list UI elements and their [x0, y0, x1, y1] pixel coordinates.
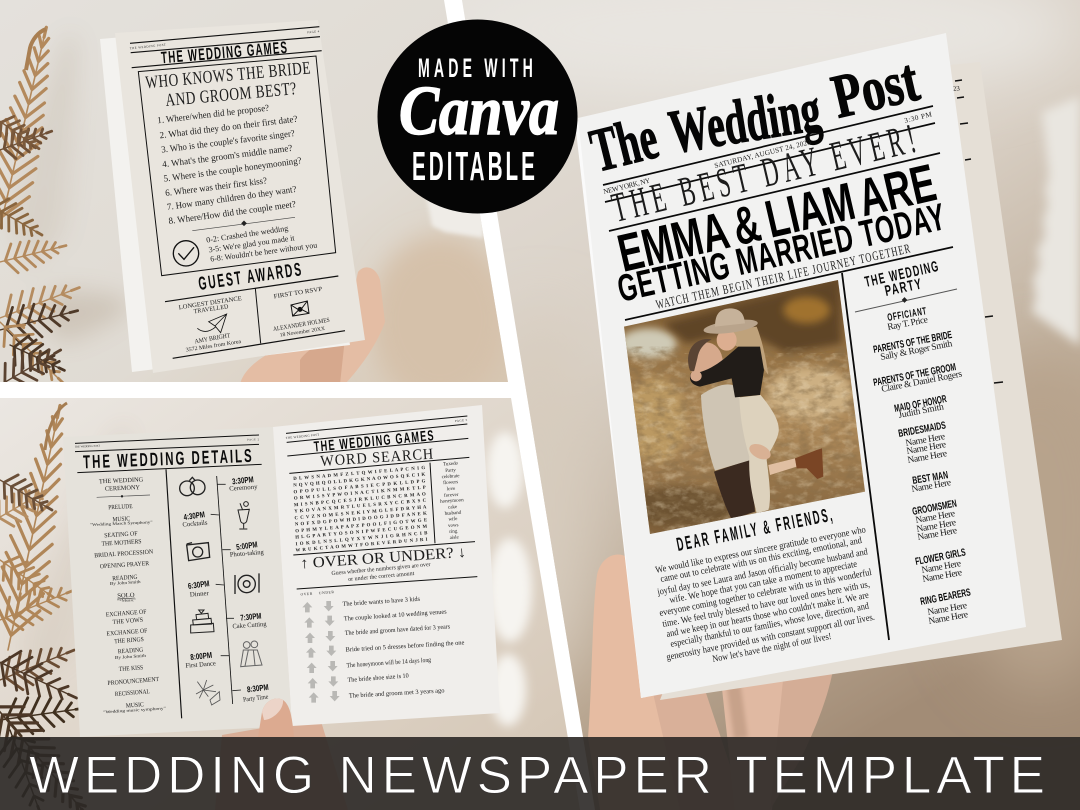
- letter body: generosity have provided us with constant support all our lives.: [665, 612, 876, 663]
- timeline times: 8:00PM: [190, 650, 212, 662]
- small labels: [130, 29, 320, 50]
- heading: who knows: AND GROOM BEST?: [165, 78, 297, 110]
- dateline: NEW YORK, NY: [603, 176, 652, 196]
- hand holding page: [240, 267, 385, 384]
- instructions: [331, 562, 431, 583]
- timeline captions: Cake Cutting: [232, 621, 267, 630]
- award: longest distance: [178, 295, 242, 354]
- heading: who knows: WHO KNOWS THE BRIDE: [145, 57, 312, 92]
- ceremony programme: SOLO: [117, 592, 135, 600]
- ceremony programme: THE WEDDING: [99, 476, 144, 485]
- title text: WEDDING NEWSPAPER TEMPLATE: [29, 746, 1045, 805]
- award: first to rsvp: FIRST TO RSVP: [273, 286, 323, 300]
- sidebar roles: [872, 305, 972, 608]
- timeline times: 8:30PM: [246, 682, 269, 694]
- sidebar names: Name Here: [905, 432, 946, 449]
- woman face: [716, 332, 736, 351]
- question list: 8. Where/How did the couple meet?: [168, 200, 297, 227]
- man head: [692, 342, 722, 372]
- word search grid: D L W S N A D M F Z L T Q W I F E L A P C N I G: [293, 466, 426, 482]
- icon: fireworks: [196, 680, 220, 705]
- small labels: PAGE 2: [247, 438, 260, 442]
- letter body: time. We feel truly blessed to have our loved ones here with us,: [661, 579, 871, 630]
- divider: [97, 495, 150, 497]
- photo grass texture: [620, 347, 873, 540]
- statements: The bride wants to have 3 kids: [342, 596, 421, 608]
- sidebar names: Name Here: [915, 509, 956, 526]
- heading: the wedding details: THE WEDDING DETAILS: [83, 445, 254, 472]
- timeline captions: Cocktails: [182, 519, 208, 529]
- sidebar names: Name Here: [916, 518, 957, 535]
- word list: cake: [448, 505, 458, 511]
- masthead: Post: [826, 46, 925, 132]
- background tan shade: [372, 229, 504, 382]
- heading: the wedding games: THE WEDDING GAMES: [160, 38, 289, 67]
- sidebar names: Name Here: [922, 568, 963, 585]
- timeline times: 5:00PM: [236, 539, 258, 552]
- timeline captions: First Dance: [185, 660, 216, 670]
- statements: [342, 596, 465, 700]
- headline: emma and liam: EMMA & LIAM ARE: [612, 153, 941, 284]
- page content: wedding details: [75, 435, 269, 718]
- back page sliver: [100, 22, 350, 372]
- ceremony programme: READING: [118, 647, 144, 655]
- woman trousers: [739, 395, 779, 513]
- icon: plate: [235, 573, 259, 594]
- fabric behind the booklet: [487, 432, 532, 726]
- timeline times: 6:30PM: [187, 578, 210, 591]
- page content: word search: [286, 416, 477, 703]
- heading: the wedding games: THE WEDDING GAMES: [313, 428, 435, 456]
- ceremony programme: By John Smith: [110, 579, 142, 586]
- timeline captions: Dinner: [190, 590, 210, 599]
- warm shade left: [518, 339, 599, 682]
- masthead: The: [584, 104, 664, 186]
- sidebar names: Name Here: [928, 610, 969, 627]
- back page: [660, 62, 1062, 700]
- sheet thickness: [575, 121, 646, 698]
- question list: 4. What's the groom's middle name?: [162, 144, 293, 170]
- ceremony programme: PRONOUNCEMENT: [107, 676, 159, 687]
- fern shadow: [14, 44, 126, 345]
- award: first to rsvp: ALEXANDER HOLMES: [273, 317, 331, 333]
- instructions: Guess whether the numbers given are over: [331, 562, 431, 577]
- ceremony programme: MUSIC: [112, 515, 130, 523]
- icon: paper plane: [197, 314, 227, 333]
- woman hat crown: [715, 308, 745, 327]
- sidebar roles: PARENTS OF THE GROOM: [872, 361, 957, 389]
- question list: 2. What did they do on their first date?: [159, 114, 298, 141]
- statements: Bride tried on 5 dresses before finding the one: [345, 639, 465, 654]
- badge: made with Canva editable: [378, 20, 578, 214]
- photo sky: [620, 328, 677, 358]
- letter body: especially thankful to our families, whose love, direction, and: [669, 601, 870, 650]
- divider: [192, 217, 295, 231]
- text: DEAR FAMILY & FRIENDS,: [675, 504, 836, 556]
- timeline times: [183, 474, 269, 694]
- score key: 3-5: We're glad you made it: [208, 233, 296, 254]
- sidebar names: Name Here: [917, 526, 958, 543]
- word list: forever: [444, 493, 459, 499]
- fern shadow: [30, 539, 74, 667]
- sidebar: the wedding party: [855, 258, 972, 627]
- question list: 5. Where is the couple honeymooning?: [163, 156, 302, 185]
- panel: main newspaper: [440, 0, 1080, 810]
- word list: Party: [445, 468, 457, 474]
- sidebar names: Name Here: [911, 478, 952, 495]
- ceremony programme: THE RINGS: [114, 636, 144, 645]
- back page date fragment: 23: [952, 84, 961, 93]
- statements: The couple looked at 10 wedding venues: [344, 608, 447, 623]
- letter body: and we keep in our hearts those who couldn't make it. We are: [665, 590, 870, 640]
- word list: flowers: [443, 480, 458, 486]
- up arrows: [302, 602, 319, 703]
- question list: [157, 104, 302, 227]
- woman top: [690, 347, 764, 397]
- award: longest distance: 3572 Miles from Korea: [185, 338, 242, 354]
- subhead: WATCH THEM BEGIN THEIR LIFE JOURNEY TOGETHER: [654, 240, 912, 312]
- ceremony programme: "Wedding music symphony": [103, 705, 166, 714]
- question list: 6. Where was their first kiss?: [165, 175, 268, 199]
- fern top-left: [0, 26, 81, 382]
- question list: 1. Where/when did he propose?: [157, 104, 270, 126]
- ceremony programme: PRELUDE: [108, 503, 133, 511]
- ceremony programme: "*Music": [117, 598, 137, 603]
- thumb over booklet: [258, 698, 294, 737]
- photo trees: [663, 280, 842, 353]
- front sheet: [578, 33, 1026, 698]
- panel: top-left games page: [0, 0, 520, 405]
- award: longest distance: LONGEST DISTANCE: [178, 295, 242, 311]
- timeline times: 3:30PM: [231, 474, 254, 486]
- timeline captions: Party Time: [243, 694, 269, 704]
- ceremony programme: MUSIC: [126, 701, 144, 710]
- icon: check circle: [173, 241, 199, 266]
- ceremony programme: SEATING OF: [104, 530, 138, 539]
- ceremony programme: EXCHANGE OF: [106, 608, 147, 619]
- column labels: OVER: [300, 592, 313, 597]
- column labels: [300, 590, 335, 597]
- timeline captions: Photo-taking: [230, 549, 265, 559]
- word search grid: N Q V Q H Q O L L D K G K N A O W O S Q E C I K: [293, 473, 426, 489]
- down arrows: [324, 601, 340, 701]
- small labels: [75, 438, 260, 449]
- ceremony programme: RECISSIONAL: [115, 688, 150, 698]
- question list: 7. How many children do they want?: [166, 185, 297, 213]
- badge text: editable: EDITABLE: [412, 143, 538, 189]
- statements: The bride shoe size is 10: [347, 672, 409, 684]
- statements: The bride and groom have dated for 3 years: [345, 623, 451, 637]
- small labels: PAGE 5: [455, 418, 468, 423]
- sidebar roles: RING BEARERS: [919, 586, 972, 608]
- ceremony programme: THE VOWS: [112, 617, 144, 626]
- sidebar names: Judith Smith: [898, 402, 945, 421]
- sidebar roles: BEST MAN: [912, 469, 949, 487]
- woman hat brim: [704, 320, 758, 334]
- sidebar roles: MAID OF HONOR: [893, 393, 948, 415]
- icon: camera: [187, 543, 210, 561]
- woman leg: [768, 458, 797, 475]
- sidebar names: Name Here: [907, 449, 948, 466]
- heading: over or under: ↑ OVER OR UNDER? ↓: [300, 544, 467, 572]
- award: longest distance: TRAVELLED: [193, 303, 229, 315]
- ceremony programme: "Wedding March Symphony": [90, 519, 153, 527]
- sidebar names: Name Here: [927, 601, 968, 618]
- word search grid: Y K O V A N X M R T L U E L S R X Y C C B X S C: [294, 499, 427, 515]
- word list: wife: [448, 517, 458, 523]
- title band: [0, 737, 1080, 810]
- woman hair: [734, 326, 768, 375]
- letter body: We would like to express our sincere gratitude to everyone who: [654, 524, 867, 576]
- fabric scrap under badge: [426, 200, 484, 239]
- award: first to rsvp: 18 November 20XX: [279, 326, 326, 339]
- score key: 0-2: Crashed the wedding: [206, 224, 289, 245]
- letter body: joyful day to see Laura and Jason officially become husband and: [656, 546, 869, 598]
- word list: honeymoon: [440, 498, 464, 505]
- icon: envelope: [291, 301, 309, 316]
- back page rule ends: [955, 80, 1003, 383]
- icon: dancing couple: [241, 641, 262, 667]
- photo: couple kissing in field: [620, 280, 873, 540]
- award: longest distance: AMY BRIGHT: [194, 332, 231, 345]
- score key: [206, 224, 318, 264]
- timeline captions: Ceremony: [229, 484, 258, 493]
- masthead: Wedding: [665, 76, 825, 167]
- sidebar heading: THE WEDDING: [863, 258, 941, 291]
- sidebar names: Sally & Roger Smith: [880, 339, 953, 363]
- ceremony programme: OPENING PRAYER: [100, 560, 150, 570]
- ceremony programme: [90, 476, 166, 714]
- ceremony programme: By John Smith: [115, 653, 147, 660]
- sidebar heading: [863, 258, 941, 300]
- page sheet: [115, 20, 365, 373]
- man sweater: [701, 384, 750, 471]
- word search grid: O P O P U L L S O F A B S I E C P D K L L D P G: [293, 479, 426, 495]
- word search grid: [293, 466, 428, 554]
- newspaper rules: [603, 106, 953, 320]
- letter body: Now let's have the night of our lives!: [711, 631, 832, 665]
- ceremony programme: BRIDAL PROCESSION: [94, 549, 154, 559]
- word search grid: O R W I S S Y P W O I N A C T I K N M M E T L P: [294, 486, 426, 502]
- photo field highlight: [767, 367, 853, 420]
- sidebar roles: GROOMSMEN: [911, 498, 958, 518]
- column labels: UNDER: [319, 590, 335, 595]
- letter body: [654, 524, 876, 665]
- sidebar names: [880, 315, 969, 627]
- sidebar names: Name Here: [921, 559, 962, 576]
- heading: word search: WORD SEARCH: [320, 445, 435, 470]
- fern lower-left: [0, 402, 87, 810]
- warm shade under the sheet: [979, 352, 1080, 692]
- man hair: [688, 339, 712, 372]
- statements: The bride and groom met 3 years ago: [349, 687, 445, 700]
- small labels: [286, 418, 468, 440]
- word list: [440, 461, 464, 541]
- dateline: SATURDAY, AUGUST 24, 2023: [714, 138, 812, 170]
- man hand: [747, 441, 773, 462]
- word search grid: W R U K C T A O M W T F O R E V E R D U N J R I: [295, 538, 428, 554]
- word list: celebrate: [441, 474, 461, 480]
- word list: ring: [449, 529, 458, 535]
- sidebar roles: BRIDESMAIDS: [897, 419, 947, 440]
- heading: who knows: [145, 57, 312, 110]
- panel: bottom-left details and games: [0, 398, 590, 810]
- timeline arrows: [211, 484, 241, 691]
- question list: 3. Who is the couple's favorite singer?: [161, 128, 295, 156]
- ceremony programme: THE KISS: [119, 664, 144, 673]
- word list: aisle: [450, 535, 460, 541]
- hand behind sheet: [588, 554, 832, 737]
- booklet left page: [63, 427, 292, 737]
- letter body: wife. We hope that you can take a moment to appreciate: [668, 559, 858, 606]
- word list: husband: [444, 511, 462, 517]
- dateline: [603, 110, 933, 196]
- fabric top right: [1032, 96, 1080, 346]
- award: first to rsvp: [273, 286, 331, 339]
- letter body: came out to celebrate with us on this exciting, emotional, and: [659, 535, 863, 585]
- sidebar roles: PARENTS OF THE BRIDE: [872, 329, 953, 356]
- photo grass light texture: [630, 353, 865, 534]
- icon: cake: [191, 610, 214, 633]
- light wash top: [520, 0, 1074, 98]
- icon: cocktail: [238, 502, 249, 529]
- sidebar roles: OFFICIANT: [886, 305, 928, 324]
- sidebar names: Ray T. Price: [887, 315, 929, 333]
- word search grid: N O F X D G P O W H D I D O O G J D D F A N E K: [295, 512, 427, 528]
- word list: love: [447, 487, 456, 492]
- hand below booklet: [222, 724, 326, 737]
- photo field shadow: [644, 484, 730, 530]
- man hand on her: [690, 371, 702, 381]
- ceremony programme: CEREMONY: [105, 484, 140, 493]
- man trousers: [714, 459, 755, 519]
- timeline captions: [182, 484, 269, 704]
- badge text: made with: MADE WITH: [418, 53, 537, 83]
- word search grid: H L G P A R T Y O S O N I P W F E C U G E O N M: [295, 525, 428, 541]
- masthead: [584, 46, 925, 186]
- small labels: THE WEDDING POST: [286, 433, 319, 440]
- sidebar names: Name Here: [906, 440, 947, 457]
- badge text: Canva: Canva: [399, 73, 559, 150]
- timeline times: 4:30PM: [183, 509, 205, 522]
- boot: [795, 448, 823, 479]
- ceremony programme: EXCHANGE OF: [106, 627, 148, 638]
- sidebar divider: [855, 289, 957, 312]
- sidebar names: Claire & Daniel Rogers: [881, 369, 963, 395]
- booklet right page: [273, 405, 500, 726]
- ceremony programme: THE MOTHERS: [101, 538, 142, 548]
- dateline: 3:30 PM: [904, 110, 933, 125]
- timeline times: 7:30PM: [240, 611, 262, 623]
- column divider: [842, 273, 889, 640]
- photo autumn leaves: [783, 297, 830, 323]
- letter body: everyone coming together to celebrate with us in this wonderful: [658, 567, 873, 619]
- ceremony programme: READING: [112, 574, 138, 582]
- score key: 6-8: Wouldn't be here without you: [210, 240, 318, 264]
- small labels: THE WEDDING POST: [75, 445, 100, 449]
- page content: who knows the bride: [130, 27, 345, 358]
- statements: The honeymoon will be 14 days long: [346, 657, 432, 669]
- word list: Tuxedo: [443, 461, 459, 468]
- word search grid: C C V Z N O M E S N E K I Y M G L E F D R Y H A: [294, 505, 427, 521]
- word search grid: I O K D L N S L L Q Y X Y W N J I G R H N C I B: [295, 531, 428, 547]
- photo field left: [627, 377, 687, 463]
- icon: rings: [180, 477, 205, 496]
- sidebar heading: PARTY: [883, 275, 924, 300]
- heading: guest awards: GUEST AWARDS: [197, 258, 304, 294]
- small labels: PAGE 4: [307, 29, 320, 34]
- small labels: THE WEDDING POST: [130, 43, 166, 50]
- instructions: or under the correct amount: [348, 571, 415, 583]
- sidebar roles: FLOWER GIRLS: [914, 546, 967, 568]
- word list: vows: [448, 523, 459, 529]
- word search grid: O P H M Y L E A P A P Z P O O L F I G O T W G E: [295, 518, 427, 534]
- word search grid: M I S N B P C Q C E S J R K L U C B N C R M A O: [294, 492, 426, 508]
